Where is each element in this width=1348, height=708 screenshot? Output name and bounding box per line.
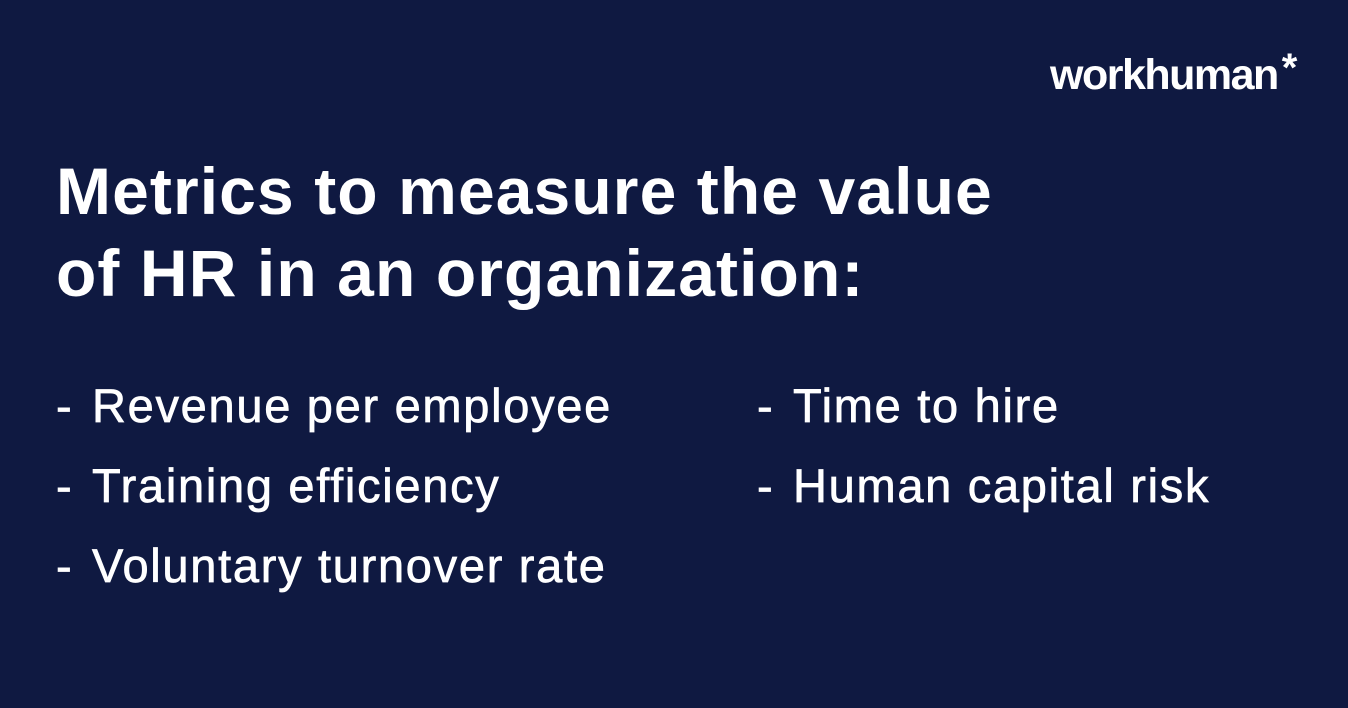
- list: right column: [757, 379, 1210, 512]
- item: time to hire: Time to hire: [793, 379, 1060, 432]
- item: human capital risk: -: [757, 459, 774, 512]
- item: revenue per employee: -: [56, 379, 73, 432]
- item: voluntary turnover rate: -: [56, 539, 73, 592]
- item: time to hire: -: [757, 379, 774, 432]
- text: *: [1282, 46, 1296, 90]
- item: training efficiency: -: [56, 459, 73, 512]
- list: left column: [56, 379, 612, 592]
- item: human capital risk: Human capital risk: [793, 459, 1210, 512]
- logo: workhuman: workhuman: [1050, 51, 1278, 99]
- title: [56, 154, 993, 310]
- item: training efficiency: Training efficiency: [92, 459, 500, 512]
- title: Metrics to measure the value: [56, 154, 993, 228]
- item: voluntary turnover rate: Voluntary turnover rate: [92, 539, 607, 592]
- title: of HR in an organization:: [56, 236, 864, 310]
- item: revenue per employee: Revenue per employee: [92, 379, 612, 432]
